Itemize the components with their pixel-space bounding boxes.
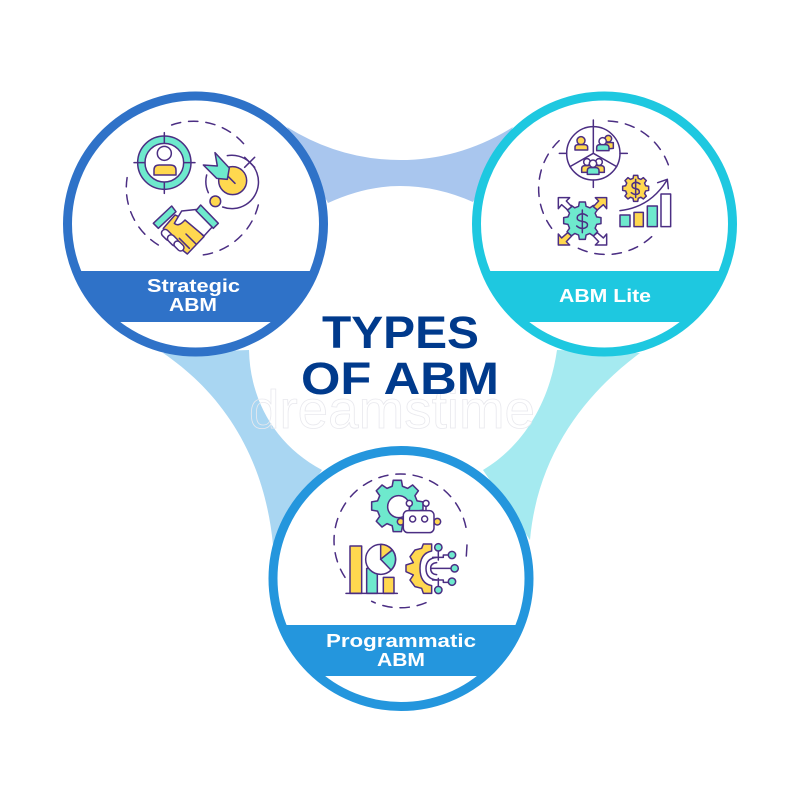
connector: top xyxy=(287,127,513,203)
panel: Programmatic ABM xyxy=(266,450,536,706)
banner: Programmatic ABM: Programmatic xyxy=(326,631,476,651)
icon group: target, dart, handshake xyxy=(126,121,258,255)
icon group: robot gear, charts, tech gear xyxy=(334,474,467,608)
panel: Strategic ABM xyxy=(60,96,330,352)
watermark: dreamstime xyxy=(249,380,535,440)
panel: ABM Lite xyxy=(470,96,740,352)
banner: ABM Lite: ABM Lite xyxy=(559,286,651,306)
title: TYPES xyxy=(322,307,479,358)
connector: right xyxy=(483,350,640,540)
title: OF ABM xyxy=(301,353,499,404)
banner: Strategic ABM xyxy=(81,271,310,322)
banner: Programmatic ABM: ABM xyxy=(377,650,425,670)
icon group: segments, gear, growth chart xyxy=(539,120,671,254)
banner: Strategic ABM: Strategic xyxy=(147,276,240,296)
banner: ABM Lite xyxy=(490,271,719,322)
connector: left xyxy=(163,350,322,545)
title xyxy=(301,307,499,404)
banner: Programmatic ABM xyxy=(286,625,516,676)
banner: Strategic ABM: ABM xyxy=(169,295,217,315)
